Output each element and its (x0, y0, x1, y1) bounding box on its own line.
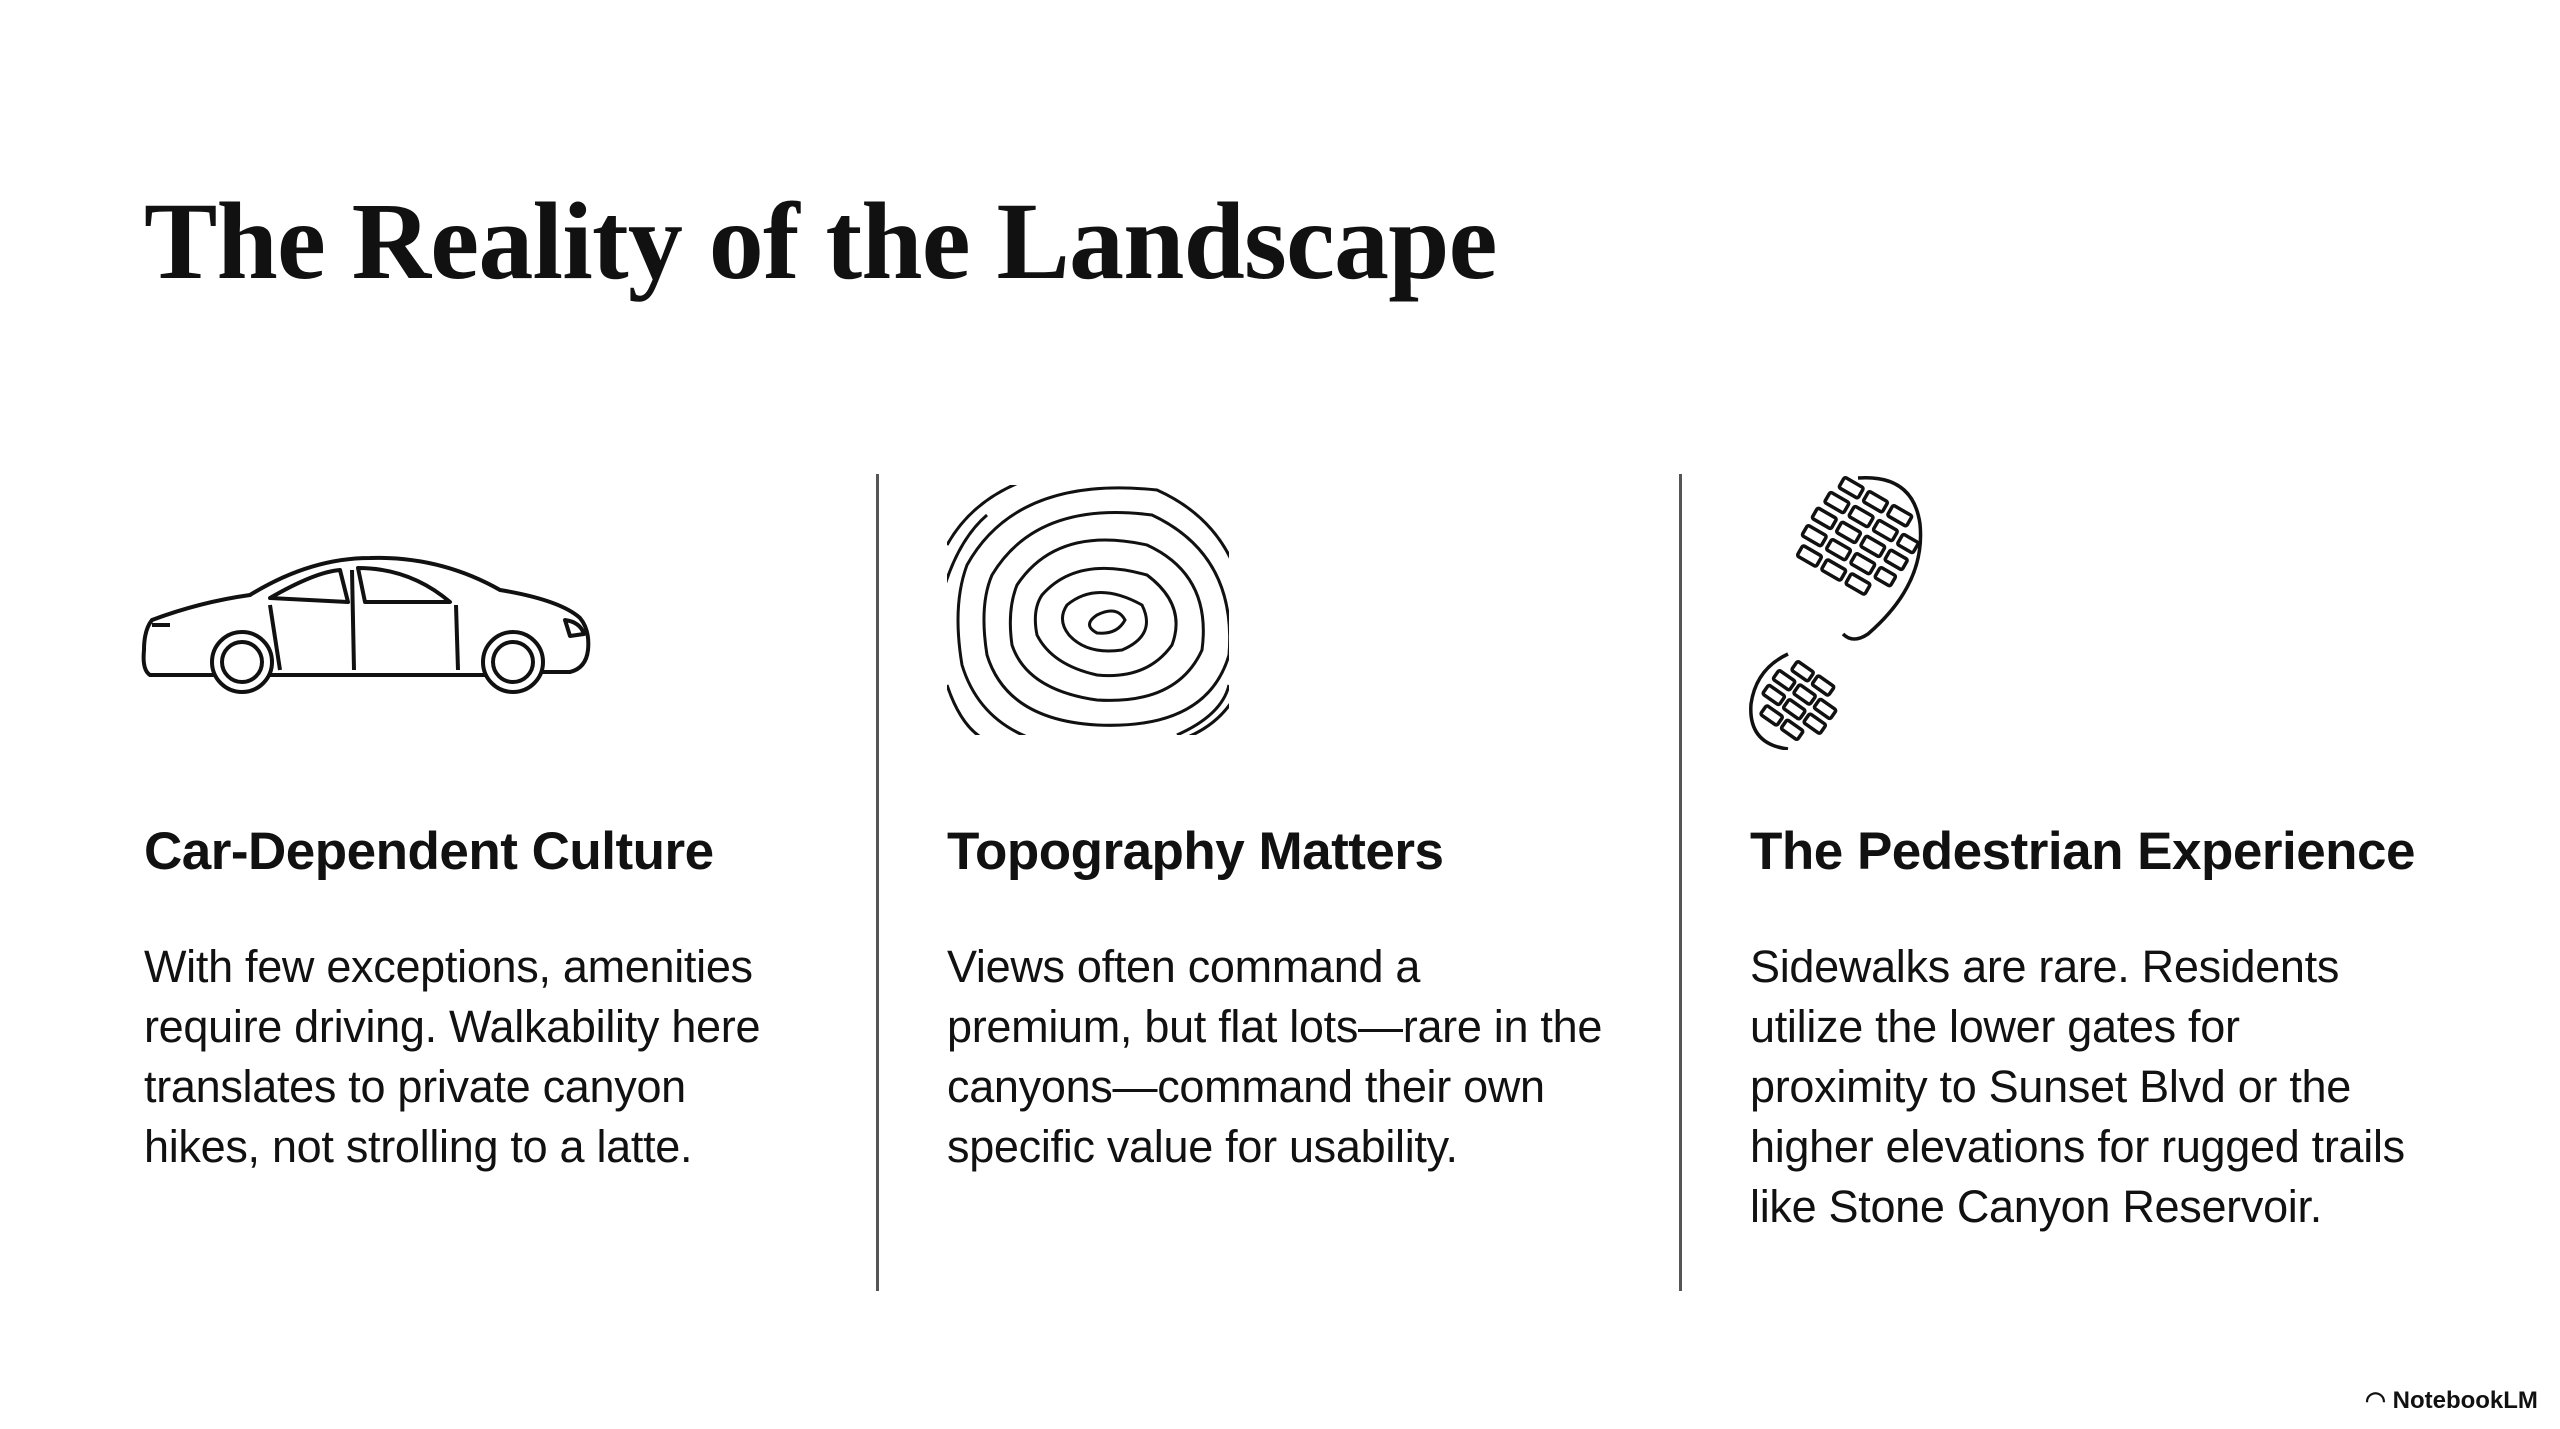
text: pedestrian: like Stone Canyon Reservoir. (1750, 1181, 2322, 1232)
text: car: With few exceptions, amenities (144, 941, 753, 992)
text: topography: Views often command a (947, 941, 1420, 992)
text: topography (947, 941, 1602, 1172)
heading: topography: Topography Matters (947, 822, 1444, 881)
text: pedestrian (1750, 941, 2405, 1232)
text: car: hikes, not strolling to a latte. (144, 1121, 692, 1172)
text: pedestrian: higher elevations for rugged trails (1750, 1121, 2405, 1172)
text: car: translates to private canyon (144, 1061, 686, 1112)
icon: topography (947, 485, 1229, 735)
text: pedestrian: Sidewalks are rare. Residents (1750, 941, 2339, 992)
text: pedestrian: proximity to Sunset Blvd or the (1750, 1061, 2351, 1112)
text: topography: premium, but flat lots—rare in the (947, 1001, 1602, 1052)
logo: NotebookLM: ◠ NotebookLM (2365, 1387, 2538, 1414)
heading: pedestrian: The Pedestrian Experience (1750, 822, 2415, 881)
heading: car: Car-Dependent Culture (144, 822, 714, 881)
text: pedestrian: utilize the lower gates for (1750, 1001, 2240, 1052)
title: The Reality of the Landscape (144, 180, 1497, 302)
text: car: require driving. Walkability here (144, 1001, 760, 1052)
text: topography: canyons—command their own (947, 1061, 1545, 1112)
text: car (144, 941, 760, 1172)
icon: boot print (1749, 476, 1922, 750)
text: topography: specific value for usability. (947, 1121, 1458, 1172)
icon: car (142, 556, 590, 694)
